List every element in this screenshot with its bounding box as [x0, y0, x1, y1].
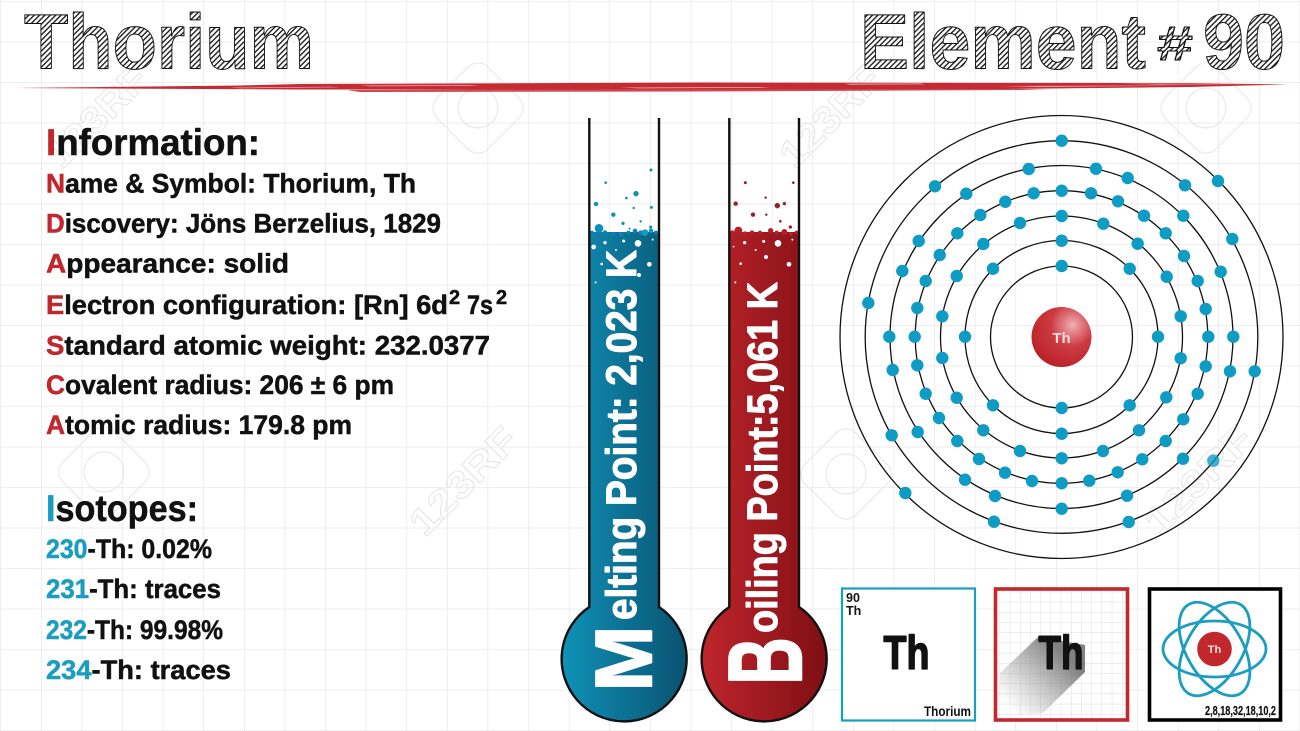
tile: periodic table cell: [842, 588, 975, 720]
bubbles inside the liquid: [591, 239, 654, 283]
long shadow: [999, 637, 1085, 716]
watermarks: 123RF: [39, 58, 157, 176]
thermometer: melting point: [562, 118, 687, 721]
label: melting point: [580, 250, 670, 692]
label: boiling point: [708, 282, 824, 684]
panel: isotopes: [46, 488, 231, 685]
discovery: Discovery: Jöns Berzelius, 1829: [46, 208, 441, 238]
atomic number and small symbol: Th: [846, 604, 861, 618]
glass outline: [702, 118, 827, 721]
heading: isotopes: Isotopes:: [46, 488, 198, 529]
element name: Thorium: [924, 703, 971, 719]
heading: Element #90: Element: [860, 0, 1146, 86]
bohr atom diagram: [840, 116, 1283, 558]
large symbol: Th: [884, 626, 930, 679]
electron configuration: 2: [496, 287, 507, 309]
symbol: Th: [1038, 626, 1084, 679]
bubbles inside the liquid: [733, 239, 793, 283]
liquid column and bulb: [702, 232, 827, 721]
thermometer: boiling point: [702, 118, 827, 721]
electron configuration: Electron configuration: [Rn] 6d: [46, 290, 448, 320]
liquid column and bulb: [562, 232, 687, 721]
isotope 234: 234-Th: traces: [46, 655, 231, 685]
label: melting point: elting Point: 2,023 K: [598, 250, 646, 620]
isotope 231: 231-Th: traces: [46, 574, 221, 604]
appearance: Appearance: solid: [46, 248, 289, 278]
atomic number and small symbol: [846, 591, 861, 618]
electron shells: [840, 116, 1283, 558]
atomic number and small symbol: 90: [846, 591, 860, 605]
liquid surface bumps: [589, 224, 658, 236]
electron configuration: 2: [449, 287, 460, 309]
electron configuration: 7s: [467, 290, 493, 320]
tile: atom icon with shell configuration: [1150, 589, 1280, 720]
liquid surface bumps: [730, 227, 799, 236]
nucleus: Th: [1208, 644, 1221, 656]
label: melting point: M: [580, 626, 670, 692]
electrons: [862, 134, 1261, 528]
watermarks: [39, 57, 1262, 544]
isotope 230: 230-Th: 0.02%: [46, 534, 212, 564]
title: Thorium: Thorium: [24, 0, 314, 86]
standard atomic weight: Standard atomic weight: 232.0377: [46, 330, 490, 360]
panel: information: [46, 122, 507, 440]
red brush stroke divider: [14, 82, 1288, 92]
nucleus: Th: [1052, 330, 1071, 347]
atom orbits: [1163, 590, 1266, 708]
isotope 232: 232-Th: 99.98%: [46, 615, 223, 645]
watermarks: 123RF: [772, 58, 890, 176]
tile: long shadow symbol: [996, 589, 1128, 720]
label: boiling point: B: [708, 638, 824, 684]
heading: Element #90: 90: [1203, 0, 1285, 86]
covalent radius: Covalent radius: 206 ± 6 pm: [46, 370, 394, 400]
glass outline: [562, 118, 687, 721]
name and symbol: Name & Symbol: Thorium, Th: [46, 168, 416, 198]
heading: information: Information:: [46, 122, 260, 163]
bubbles above the liquid: [734, 181, 794, 228]
bubbles above the liquid: [594, 169, 653, 229]
watermarks: 123RF: [1137, 418, 1262, 543]
atomic radius: Atomic radius: 179.8 pm: [46, 410, 352, 440]
label: boiling point: oiling Point:5,061 K: [739, 282, 787, 633]
heading: Element #90: #: [1157, 18, 1193, 71]
watermarks: 123RF: [402, 419, 527, 544]
nucleus: [1032, 307, 1092, 367]
